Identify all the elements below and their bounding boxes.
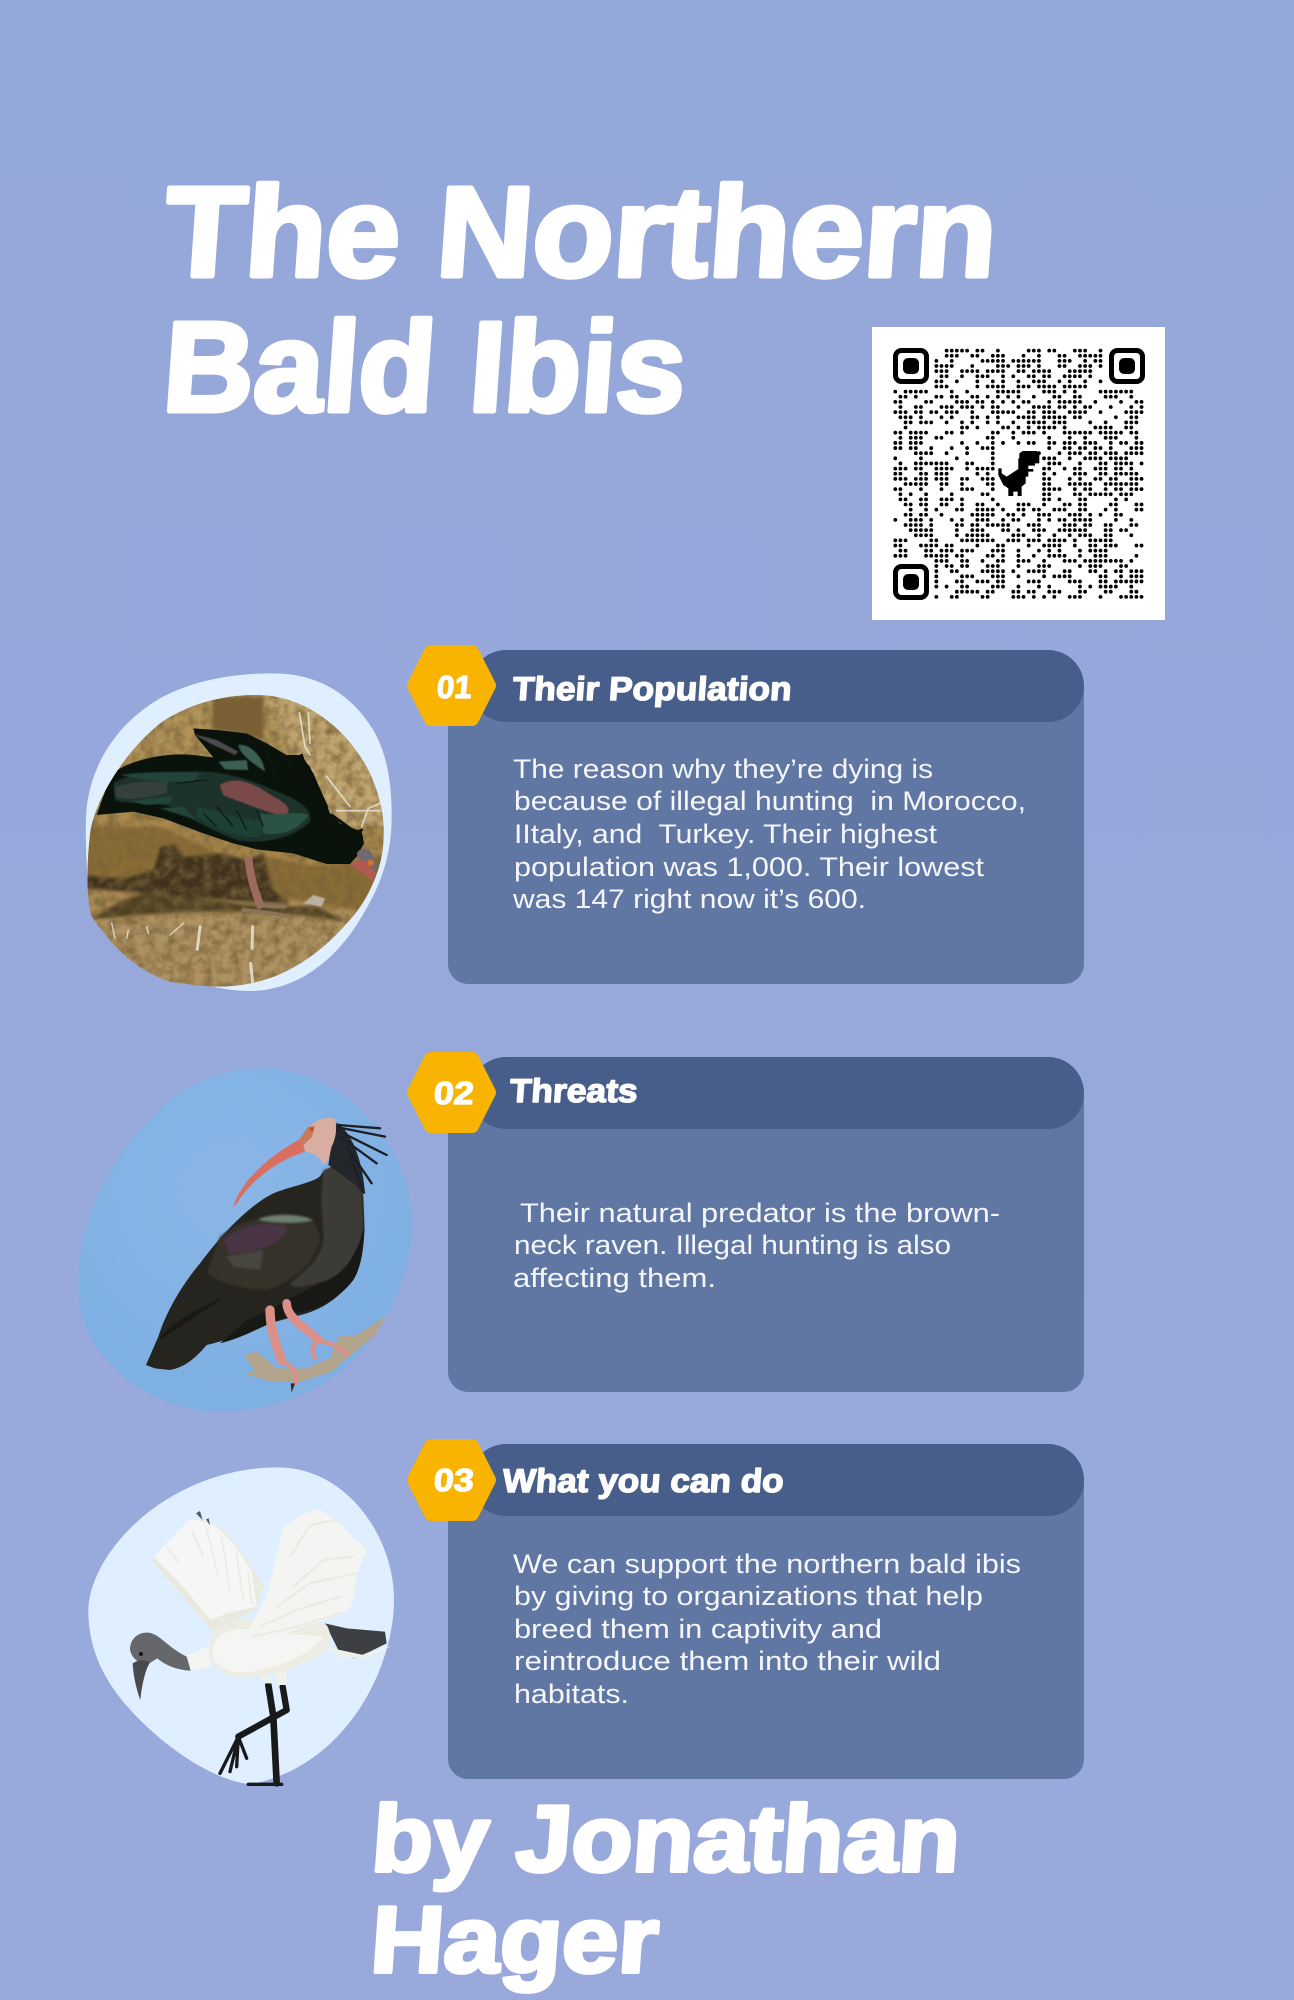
light blob backing xyxy=(86,673,392,991)
heading: Their Population xyxy=(511,671,793,708)
panel: what you can do xyxy=(414,1444,1084,1779)
card header xyxy=(470,1444,1084,1516)
title: Bald Ibis xyxy=(159,296,691,439)
card body xyxy=(448,1480,1084,1779)
QR code xyxy=(872,327,1165,620)
ibis head xyxy=(357,849,377,882)
panel: threats xyxy=(414,1057,1084,1392)
body text: reintroduce them into their wild xyxy=(514,1646,941,1676)
rear wing xyxy=(152,1518,264,1632)
number badge: 01 xyxy=(435,669,474,705)
ibis body xyxy=(146,1163,364,1370)
number badge xyxy=(414,1059,489,1126)
ibis tail xyxy=(325,1623,387,1658)
ibis body xyxy=(97,728,364,864)
body text: population was 1,000. Their lowest xyxy=(514,852,985,882)
number badge xyxy=(414,652,489,719)
number badge xyxy=(414,1446,489,1514)
white droppings xyxy=(112,713,380,983)
heading: Threats xyxy=(508,1073,639,1110)
QR finder patterns xyxy=(896,350,1142,598)
card body xyxy=(448,1093,1084,1392)
body text: neck raven. Illegal hunting is also xyxy=(514,1230,951,1260)
body text xyxy=(513,1198,1000,1293)
card header xyxy=(470,650,1084,722)
QR modules xyxy=(895,351,1142,597)
ibis neck and head xyxy=(185,1647,211,1671)
title xyxy=(159,161,1002,439)
body text xyxy=(513,1549,1021,1709)
sky blob xyxy=(78,1068,412,1412)
ibis leg xyxy=(248,857,262,908)
author credit: Hager xyxy=(368,1887,662,1992)
body text: We can support the northern bald ibis xyxy=(513,1549,1021,1579)
front wing xyxy=(245,1508,367,1640)
branch xyxy=(244,1317,387,1382)
ibis legs and feet xyxy=(270,1303,347,1383)
rock photo xyxy=(88,695,384,986)
body text: because of illegal hunting in Morocco, xyxy=(514,786,1026,816)
body text: breed them in captivity and xyxy=(514,1614,882,1644)
body text xyxy=(512,754,1026,914)
ibis crest xyxy=(328,1123,365,1193)
illustration: white ibis xyxy=(88,1467,394,1784)
ibis head and bill xyxy=(303,1118,336,1165)
photo: ibis on branch with blue sky xyxy=(78,1068,412,1412)
card body xyxy=(448,686,1084,984)
ibis legs xyxy=(220,1685,287,1784)
card header xyxy=(470,1057,1084,1129)
body text: by giving to organizations that help xyxy=(514,1581,983,1611)
ibis body xyxy=(208,1618,330,1677)
QR dinosaur logo xyxy=(998,451,1039,496)
body text: was 147 right now it’s 600. xyxy=(512,884,866,914)
body text: Their natural predator is the brown- xyxy=(520,1198,1000,1228)
body text: The reason why they’re dying is xyxy=(513,754,933,784)
body text: affecting them. xyxy=(513,1263,716,1293)
body text: habitats. xyxy=(514,1679,629,1709)
author credit: by Jonathan xyxy=(369,1786,964,1891)
title: The Northern xyxy=(160,161,1002,304)
body text: IItaly, and Turkey. Their highest xyxy=(514,819,938,849)
pale blob xyxy=(88,1467,394,1784)
author credit xyxy=(368,1786,964,1992)
number badge: 03 xyxy=(432,1462,476,1498)
photo: ibis on rock xyxy=(77,673,393,993)
panel: their population xyxy=(414,650,1084,984)
number badge: 02 xyxy=(432,1075,476,1111)
heading: What you can do xyxy=(501,1463,785,1500)
